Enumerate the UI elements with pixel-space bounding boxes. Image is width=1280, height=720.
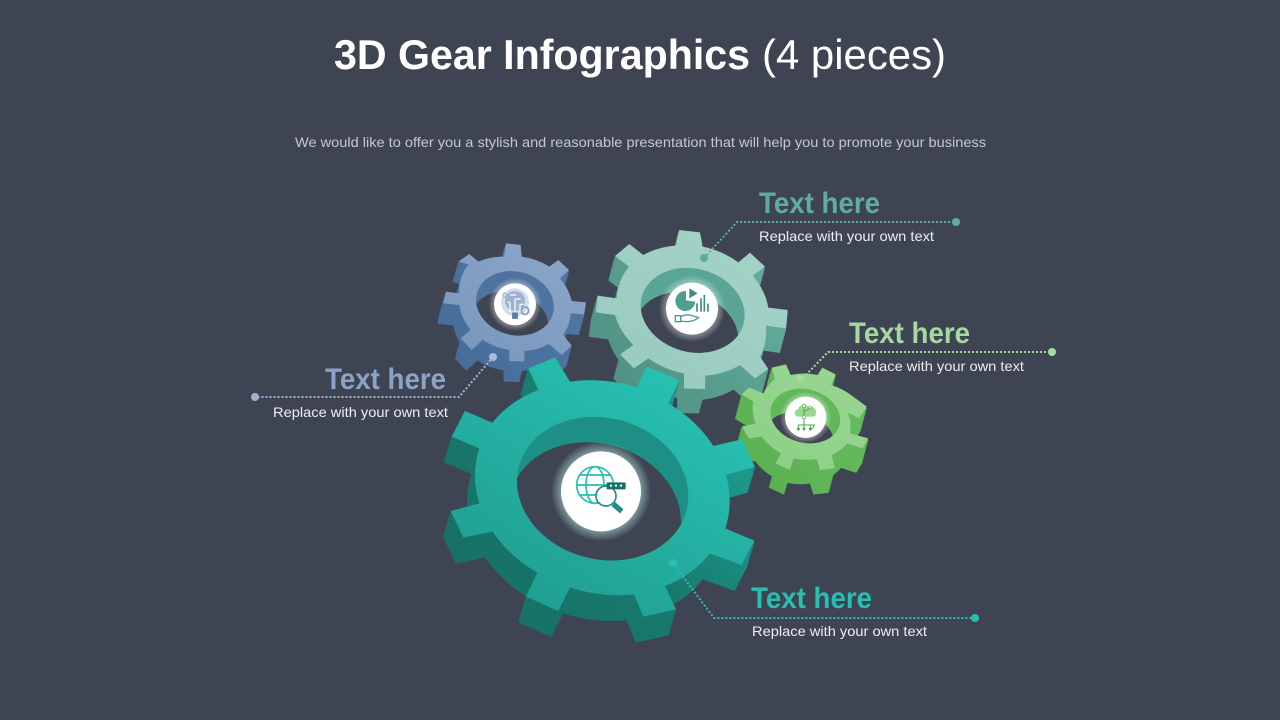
title: (4 pieces) [762, 31, 946, 78]
icon: cloud network [785, 397, 826, 438]
callout: large teal [669, 559, 979, 639]
icon: light bulb [494, 283, 536, 325]
gear: green [735, 364, 868, 494]
callout: large teal: Replace with your own text [752, 623, 927, 639]
subtitle: We would like to offer you a stylish and reasonable presentation that will help you to promote your business [295, 134, 986, 150]
gear: blue [438, 243, 586, 382]
gear: large teal [443, 357, 755, 642]
callout: green [796, 317, 1056, 383]
callout: light teal: Text here [759, 187, 880, 220]
icon: globe and magnifier [561, 451, 641, 531]
title: 3D Gear Infographics [334, 31, 750, 78]
title [334, 31, 946, 78]
callout: light teal: Replace with your own text [759, 228, 934, 244]
callout: light teal [700, 187, 960, 262]
gear: light teal [589, 230, 788, 413]
callout: green: Text here [849, 317, 970, 350]
callout: blue: Replace with your own text [273, 404, 448, 420]
callout: blue [251, 353, 497, 420]
callout: green: Replace with your own text [849, 358, 1024, 374]
callout: blue: Text here [325, 363, 446, 396]
callout: large teal: Text here [751, 582, 872, 615]
icon: pie chart and hand [666, 283, 718, 335]
